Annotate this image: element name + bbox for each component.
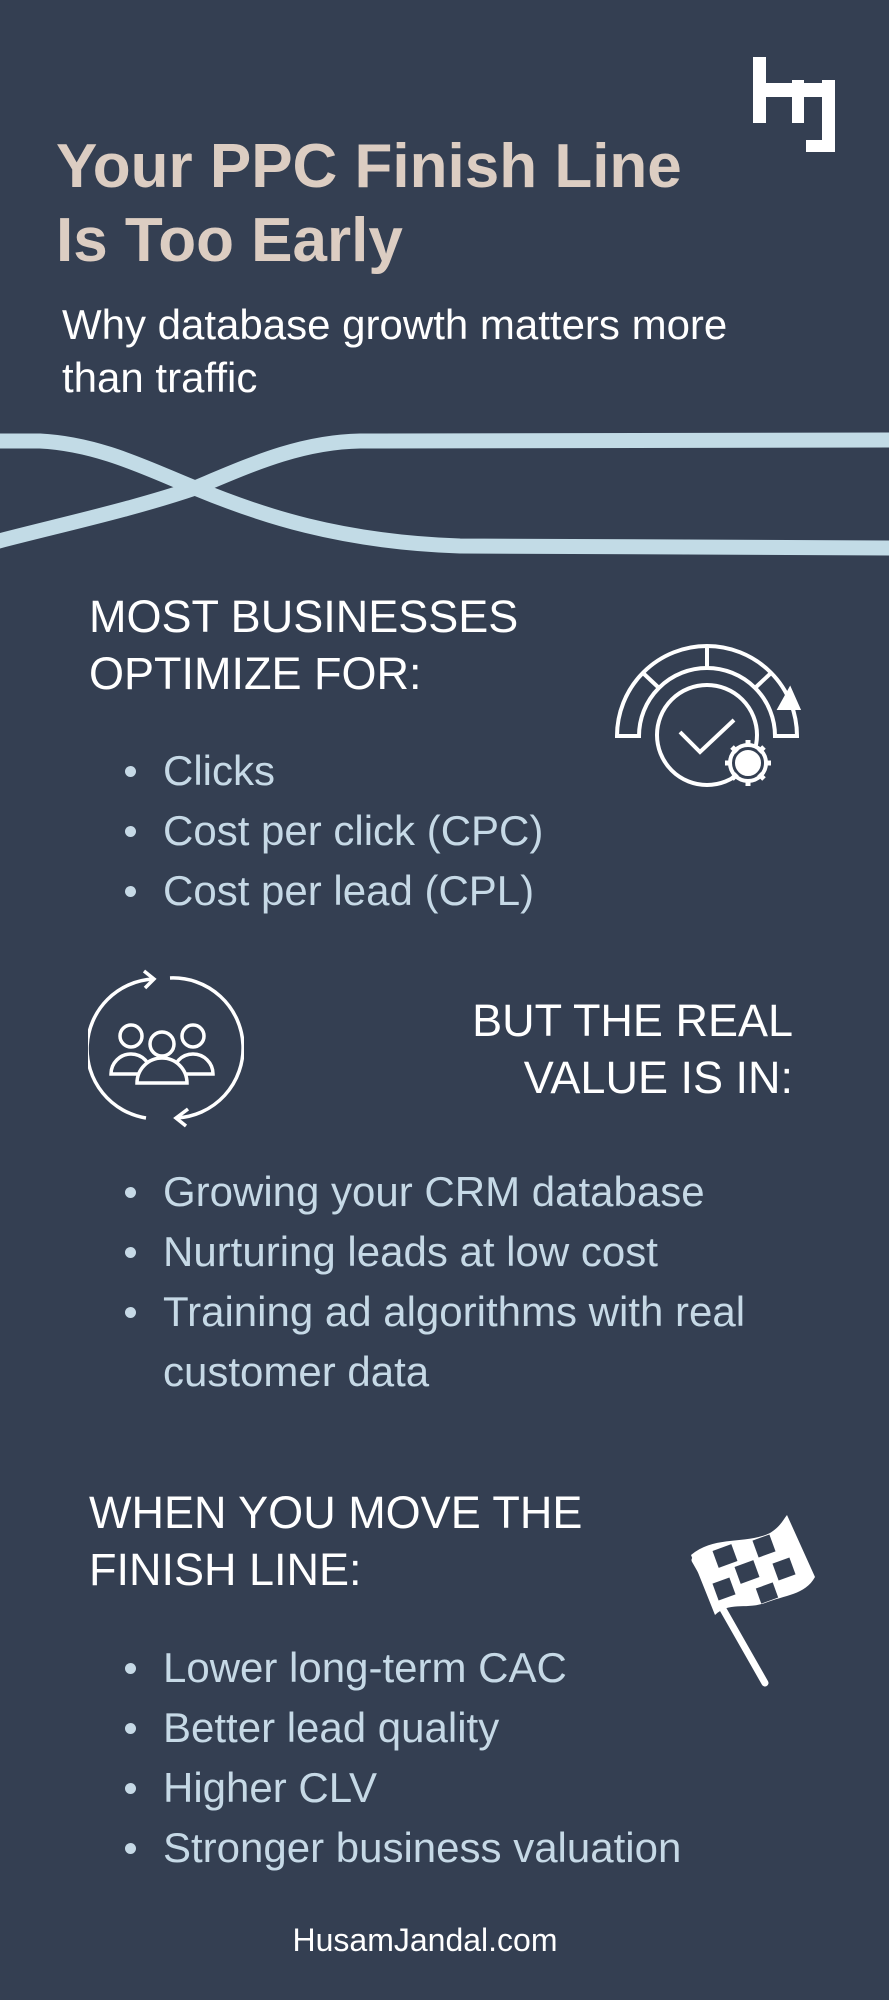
list: real value: Training ad algorithms with real customer data (163, 1288, 745, 1395)
section 2 heading (472, 995, 793, 1103)
section 1 heading (89, 591, 518, 699)
title: Is Too Early (56, 206, 403, 275)
footer: HusamJandal.com (292, 1922, 558, 1958)
list: real value: Growing your CRM database (163, 1168, 705, 1215)
title (56, 132, 682, 275)
logo (753, 57, 835, 152)
title: Your PPC Finish Line (56, 132, 682, 201)
icon: people cycle (88, 970, 244, 1128)
list: benefits: Lower long-term CAC (163, 1644, 567, 1691)
list: real value (125, 1168, 745, 1395)
list: real value: Nurturing leads at low cost (163, 1228, 658, 1275)
section 3 heading (89, 1487, 582, 1595)
section 1 heading: MOST BUSINESSES (89, 591, 518, 642)
list: optimize for (125, 747, 543, 914)
list: optimize for: Clicks (163, 747, 275, 794)
subtitle (62, 301, 727, 401)
list: benefits: Stronger business valuation (163, 1824, 681, 1871)
list: benefits (125, 1644, 681, 1871)
section 3 heading: WHEN YOU MOVE THE (89, 1487, 582, 1538)
subtitle: than traffic (62, 354, 257, 401)
section 2 heading: BUT THE REAL (472, 995, 793, 1046)
icon: gauge with check and gear (615, 644, 801, 787)
icon: checkered flag (691, 1515, 815, 1686)
list: optimize for: Cost per click (CPC) (163, 807, 543, 854)
section 2 heading: VALUE IS IN: (524, 1052, 793, 1103)
list: optimize for: Cost per lead (CPL) (163, 867, 534, 914)
list: benefits: Higher CLV (163, 1764, 377, 1811)
subtitle: Why database growth matters more (62, 301, 727, 348)
wave divider (0, 432, 889, 556)
section 3 heading: FINISH LINE: (89, 1544, 362, 1595)
section 1 heading: OPTIMIZE FOR: (89, 648, 422, 699)
list: benefits: Better lead quality (163, 1704, 499, 1751)
